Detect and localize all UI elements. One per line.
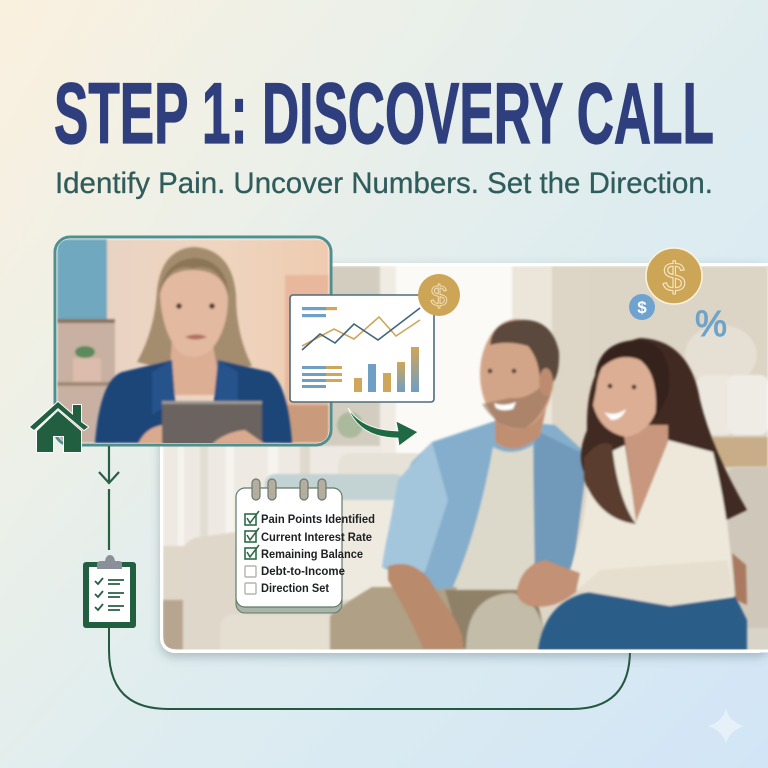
legend bars — [302, 307, 337, 317]
hair — [490, 320, 559, 385]
tablet and hands — [162, 401, 262, 445]
icon: sparkle watermark — [708, 708, 744, 744]
icon: big dollar coin: $ — [663, 254, 686, 300]
sweater — [570, 440, 734, 606]
clasped hands — [517, 560, 580, 607]
subtitle: Identify Pain. Uncover Numbers. Set the Direction. — [55, 167, 713, 200]
icon: percent sign: % — [695, 303, 727, 344]
checklist card — [236, 479, 375, 613]
office background — [57, 239, 329, 443]
neck — [494, 408, 547, 450]
binder rings — [252, 479, 326, 500]
hair — [137, 247, 252, 370]
blazer — [94, 360, 177, 443]
room background — [163, 266, 768, 650]
neck — [168, 340, 222, 395]
face — [160, 270, 228, 357]
checked boxes — [245, 511, 259, 559]
face — [593, 350, 660, 437]
video call panel: advisor — [55, 237, 331, 445]
icon: house — [30, 402, 88, 452]
hair front — [595, 340, 669, 420]
connector line: clipboard to photo panel — [109, 627, 630, 709]
advisor — [95, 247, 292, 445]
bar chart — [354, 347, 419, 392]
connector: down arrow and line — [99, 446, 119, 550]
icon: dollar coin on chart — [418, 274, 460, 316]
line chart — [302, 308, 420, 350]
checklist text — [261, 514, 375, 595]
icon: small blue dollar coin: $ — [637, 298, 647, 317]
khaki trousers — [330, 587, 470, 650]
arm and hand — [388, 564, 463, 649]
icon: big dollar coin — [646, 248, 702, 304]
icon: small blue dollar coin — [629, 294, 655, 320]
checklist text: Pain Points Identified — [261, 514, 375, 526]
checklist text: Debt-to-Income — [261, 566, 345, 578]
denim shirt — [382, 420, 588, 590]
panel inner border — [162, 264, 768, 651]
man — [330, 319, 588, 650]
chart card — [290, 295, 434, 402]
icon: clipboard — [83, 555, 136, 628]
checklist text: Remaining Balance — [261, 549, 363, 561]
arrow: chart to couple — [348, 408, 418, 446]
checklist text: Direction Set — [261, 583, 329, 595]
text-row bars — [302, 366, 342, 388]
neckline skin — [622, 425, 668, 522]
hair back — [581, 338, 747, 522]
checklist text: Current Interest Rate — [261, 532, 372, 544]
icon: dollar coin on chart: $ — [431, 280, 448, 313]
jeans — [538, 592, 747, 650]
sofa — [163, 453, 768, 652]
photo panel: couple on sofa — [160, 263, 768, 653]
hand behind woman — [732, 553, 747, 605]
empty boxes — [245, 566, 256, 594]
woman — [517, 338, 747, 650]
t-shirt — [453, 445, 535, 587]
face — [480, 319, 554, 429]
